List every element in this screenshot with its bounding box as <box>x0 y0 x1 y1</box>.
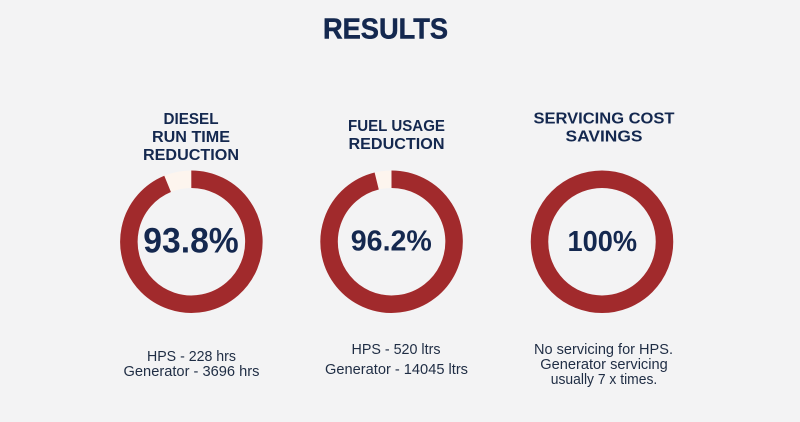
value: 100%: 100% <box>568 226 637 258</box>
description: diesel run time: Generator - 3696 hrs <box>124 363 260 380</box>
description: diesel run time <box>124 348 260 380</box>
description: diesel run time: HPS - 228 hrs <box>147 348 236 365</box>
description: fuel usage: Generator - 14045 ltrs <box>325 361 468 378</box>
heading: servicing cost savings: SAVINGS <box>566 129 643 146</box>
heading: fuel usage reduction <box>348 118 445 153</box>
heading: servicing cost savings <box>534 111 675 146</box>
heading: fuel usage reduction: FUEL USAGE <box>348 118 445 135</box>
description: servicing: Generator servicing <box>540 356 668 373</box>
value: 96.2%: 96.2% <box>351 226 432 258</box>
title: RESULTS <box>323 14 448 46</box>
panel: diesel run time reduction <box>124 111 260 380</box>
value: 93.8%: 93.8% <box>143 222 239 261</box>
donut chart: 100% <box>540 179 664 304</box>
panel: servicing cost savings <box>534 111 675 388</box>
description: fuel usage <box>325 341 468 378</box>
heading: fuel usage reduction: REDUCTION <box>348 136 444 153</box>
donut chart: 93.8% <box>129 179 254 304</box>
description: servicing: No servicing for HPS. <box>534 341 673 358</box>
panel: fuel usage reduction <box>325 118 468 378</box>
heading: diesel run time reduction: REDUCTION <box>143 147 239 164</box>
donut chart: 96.2% <box>329 179 454 304</box>
description: fuel usage: HPS - 520 ltrs <box>352 341 440 358</box>
description: servicing <box>534 341 673 388</box>
description: servicing: usually 7 x times. <box>551 371 657 388</box>
heading: diesel run time reduction: DIESEL <box>164 111 219 128</box>
heading: diesel run time reduction: RUN TIME <box>152 129 230 146</box>
heading: diesel run time reduction <box>143 111 239 164</box>
heading: servicing cost savings: SERVICING COST <box>534 111 675 128</box>
